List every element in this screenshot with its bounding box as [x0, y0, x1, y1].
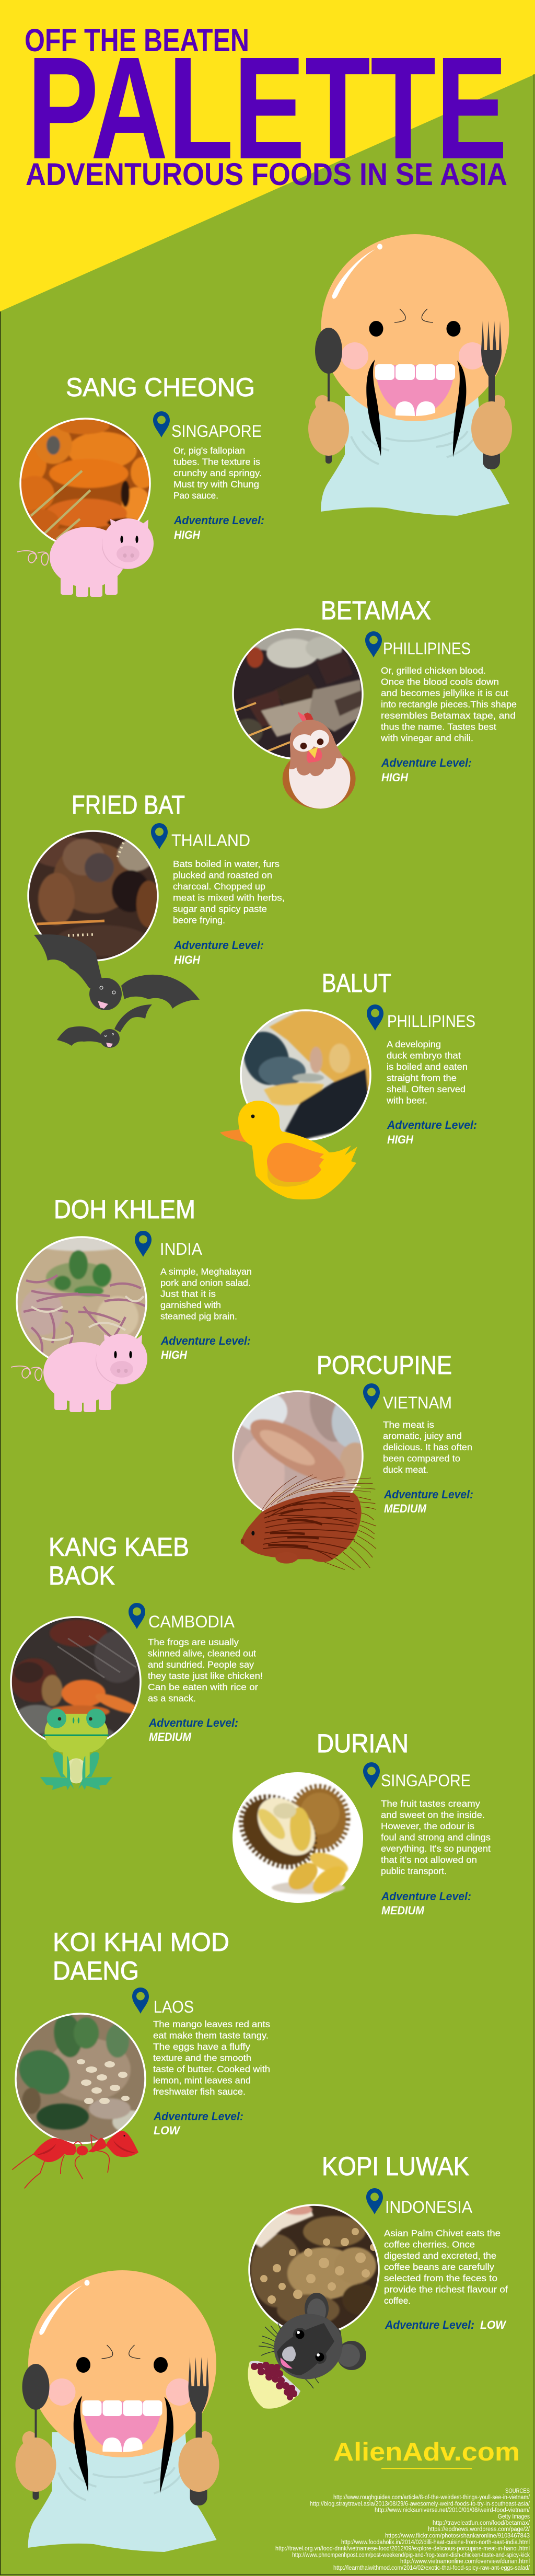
heading: KOI KHAI MOD [53, 1927, 229, 1957]
adventure level: LOW [480, 2318, 507, 2331]
illustration: pig [17, 518, 154, 597]
icon: location pin [365, 631, 382, 657]
description: aromatic, juicy and [383, 1431, 462, 1441]
heading: BALUT [322, 968, 391, 998]
description: Bats boiled in water, furs [173, 859, 280, 869]
country: PHILLIPINES [387, 1012, 475, 1031]
illustration: large bat [34, 934, 200, 1010]
illustration: porcupine [241, 1475, 376, 1570]
description: that it's not allowed on [381, 1854, 477, 1865]
country: THAILAND [171, 831, 250, 850]
description: with beer. [386, 1095, 427, 1106]
logo: alienadv.com: AlienAdv.com [333, 2438, 520, 2466]
photo: kopi luwak beans [249, 2203, 379, 2335]
adventure level: Adventure Level: [160, 1334, 251, 1347]
description: freshwater fish sauce. [153, 2086, 246, 2097]
section: kopi luwak [248, 2152, 508, 2409]
adventure level: Adventure Level: [148, 1716, 238, 1729]
photo: grilled chicken blood [233, 628, 363, 759]
description: with vinegar and chili. [380, 733, 473, 743]
description: coffee. [384, 2295, 411, 2306]
heading: SANG CHEONG [66, 373, 255, 402]
description [173, 859, 285, 925]
section: doh khlem [11, 1195, 252, 1412]
description: A simple, Meghalayan [160, 1266, 252, 1277]
adventure level [381, 756, 472, 784]
description: selected from the feces to [384, 2273, 497, 2283]
sources: Getty Images [498, 2514, 530, 2520]
heading: KOPI LUWAK [322, 2152, 469, 2181]
description [384, 2228, 508, 2306]
illustration: civet with coffee cherries [248, 2293, 366, 2409]
description: into rectangle pieces.This shape [381, 699, 517, 710]
country: CAMBODIA [148, 1612, 235, 1631]
sources [275, 2488, 530, 2571]
adventure level: Adventure Level: [381, 756, 472, 769]
description: delicious. It has often [383, 1442, 472, 1452]
heading: DAENG [53, 1956, 139, 1985]
sources: http://traveleatfun.com/food/betamax/ [433, 2520, 530, 2526]
country: VIETNAM [383, 1393, 452, 1412]
description: The eggs have a fluffy [153, 2041, 250, 2052]
icon: location pin [153, 411, 170, 437]
description: A developing [387, 1039, 441, 1049]
description: thus the name. Tastes best [381, 721, 496, 732]
adventure level [148, 1716, 238, 1743]
description: coffee beans are carefully [384, 2262, 494, 2272]
photo: porcupine meat [232, 1390, 364, 1511]
illustration: duck [220, 1101, 357, 1199]
description [148, 1637, 263, 1704]
country: LAOS [154, 1997, 194, 2016]
background: yellow diagonal [0, 0, 535, 311]
heading [53, 1927, 229, 1985]
icon: location pin [366, 2188, 383, 2214]
photo: pig fallopian tubes on skewers [19, 418, 151, 542]
illustration: chicken [283, 712, 356, 808]
photo: fried bat [28, 831, 161, 961]
description: they taste just like chicken! [148, 1670, 263, 1681]
section: balut [220, 968, 477, 1199]
adventure level: HIGH [381, 771, 409, 784]
sources: http://www.nicksuniverse.net/2010/01/08/weird-food-vietnam/ [375, 2508, 530, 2514]
description: texture and the smooth [153, 2053, 251, 2063]
icon: location pin [135, 1231, 152, 1257]
illustration: pig [11, 1334, 147, 1412]
adventure level [160, 1334, 251, 1361]
adventure level: Adventure Level: [381, 1890, 471, 1903]
icon: location pin [367, 1004, 383, 1031]
adventure level: Adventure Level: [385, 2318, 474, 2331]
character: man with spoon and fork [308, 234, 512, 516]
adventure level: LOW [154, 2124, 181, 2137]
description: Or, pig's fallopian [173, 445, 245, 456]
description: and becomes jellylike it is cut [381, 688, 508, 698]
section: porcupine [233, 1350, 473, 1570]
section: fried bat [28, 790, 285, 1048]
section: durian [227, 1729, 491, 1917]
description: resembles Betamax tape, and [381, 710, 516, 721]
photo: ant egg salad [12, 2012, 149, 2143]
adventure level [387, 1118, 477, 1146]
heading [49, 1532, 189, 1590]
heading: BETAMAX [321, 596, 431, 625]
photo: grilled frog [10, 1617, 142, 1747]
icon: location pin [151, 823, 168, 849]
description [380, 665, 517, 743]
description [160, 1266, 252, 1321]
description: Can be eaten with rice or [148, 1682, 258, 1692]
description: pork and onion salad. [160, 1277, 251, 1288]
adventure level: Adventure Level: [387, 1118, 477, 1131]
title line: off the beaten: OFF THE BEATEN [25, 22, 249, 58]
description: been compared to [383, 1453, 460, 1463]
description: meat is mixed with herbs, [173, 893, 285, 903]
adventure level: HIGH [161, 1348, 188, 1361]
description: skinned alive, cleaned out [148, 1648, 256, 1659]
sources: SOURCES [505, 2488, 530, 2494]
description: Pao sauce. [173, 490, 218, 501]
sources: http://www.vietnamonline.com/overview/durian.html [400, 2559, 530, 2565]
description: tubes. The texture is [173, 457, 260, 467]
photo: balut [237, 1010, 370, 1140]
description: garnished with [160, 1300, 221, 1310]
description: as a snack. [148, 1693, 196, 1704]
adventure level: MEDIUM [384, 1502, 427, 1515]
description: steamed pig brain. [160, 1311, 237, 1321]
illustration: red ant [12, 2131, 138, 2188]
description: Just that it is [160, 1289, 216, 1299]
heading: FRIED BAT [72, 790, 185, 819]
adventure level: HIGH [387, 1133, 414, 1146]
description: duck embryo that [387, 1050, 461, 1061]
description: and sundried. People say [148, 1659, 254, 1670]
adventure level [173, 514, 264, 541]
heading: DURIAN [317, 1729, 409, 1758]
section: kang kaeb baok [10, 1532, 263, 1790]
adventure level: Adventure Level: [383, 1488, 473, 1501]
section: koi khai mod daeng [12, 1927, 270, 2188]
icon: location pin [363, 1762, 380, 1788]
description: everything. It's so pungent [381, 1843, 491, 1854]
photo: doh khlem salad [17, 1237, 146, 1367]
sources: https://www.flickr.com/photos/shankaronline/9103467843 [385, 2533, 530, 2539]
country: PHILLIPINES [383, 639, 471, 658]
country: INDONESIA [385, 2198, 473, 2216]
adventure level: MEDIUM [381, 1904, 425, 1917]
illustration: frog [40, 1708, 112, 1790]
country: SINGAPORE [171, 422, 262, 441]
description: digested and excreted, the [384, 2250, 496, 2261]
description: shell. Often served [387, 1084, 466, 1094]
country: INDIA [160, 1240, 203, 1258]
heading: BAOK [49, 1561, 115, 1590]
description: duck meat. [383, 1464, 428, 1475]
description: and sweet on the inside. [381, 1809, 485, 1820]
description: The meat is [383, 1419, 434, 1430]
heading: DOH KHLEM [54, 1195, 195, 1224]
adventure level: Adventure Level: [173, 514, 264, 527]
description [173, 445, 262, 501]
section: sang cheong [15, 373, 264, 597]
description: provide the richest flavour of [384, 2284, 508, 2294]
adventure level: MEDIUM [149, 1730, 192, 1743]
description: foul and strong and clings [381, 1832, 491, 1843]
description: The fruit tastes creamy [381, 1798, 480, 1809]
heading: PORCUPINE [317, 1350, 452, 1380]
description: Asian Palm Chivet eats the [384, 2228, 501, 2238]
adventure level: Adventure Level: [153, 2110, 243, 2123]
heading: KANG KAEB [49, 1532, 189, 1562]
section: betamax [233, 596, 517, 808]
description: Once the blood cools down [381, 676, 499, 687]
adventure level: Adventure Level: [173, 939, 264, 952]
description: is boiled and eaten [387, 1061, 468, 1072]
title [25, 22, 507, 192]
icon: location pin [363, 1383, 380, 1410]
adventure level: HIGH [174, 953, 201, 966]
character: man at bottom [16, 2270, 219, 2552]
icon: location pin [132, 1988, 149, 2014]
description: straight from the [387, 1072, 457, 1083]
description: beore frying. [173, 915, 225, 925]
description: The mango leaves red ants [153, 2019, 270, 2029]
adventure level [173, 939, 264, 966]
adventure level [381, 1890, 471, 1917]
description: charcoal. Chopped up [173, 881, 265, 892]
adventure level [153, 2110, 243, 2137]
country: SINGAPORE [381, 1771, 471, 1790]
description [383, 1419, 472, 1475]
icon: location pin [129, 1603, 145, 1629]
description: public transport. [381, 1866, 447, 1876]
photo: durian [227, 1772, 363, 1903]
description [386, 1039, 468, 1106]
adventure level: HIGH [174, 528, 201, 541]
adventure level [383, 1488, 473, 1515]
description: Must try with Chung [173, 479, 259, 489]
description: coffee cherries. Once [384, 2239, 475, 2249]
description: taste of butter. Cooked with [153, 2064, 270, 2074]
illustration: small bat [57, 1004, 152, 1048]
description: However, the odour is [381, 1821, 474, 1831]
description [381, 1798, 491, 1876]
description: eat make them taste tangy. [153, 2030, 269, 2040]
description: Or, grilled chicken blood. [381, 665, 486, 676]
description: The frogs are usually [148, 1637, 239, 1647]
description: sugar and spicy paste [173, 904, 267, 914]
sources: https://epdnews.wordpress.com/page/2/ [428, 2526, 530, 2533]
description: plucked and roasted on [173, 870, 272, 880]
description: lemon, mint leaves and [153, 2075, 251, 2085]
description [153, 2019, 270, 2097]
description: crunchy and springy. [173, 468, 262, 478]
